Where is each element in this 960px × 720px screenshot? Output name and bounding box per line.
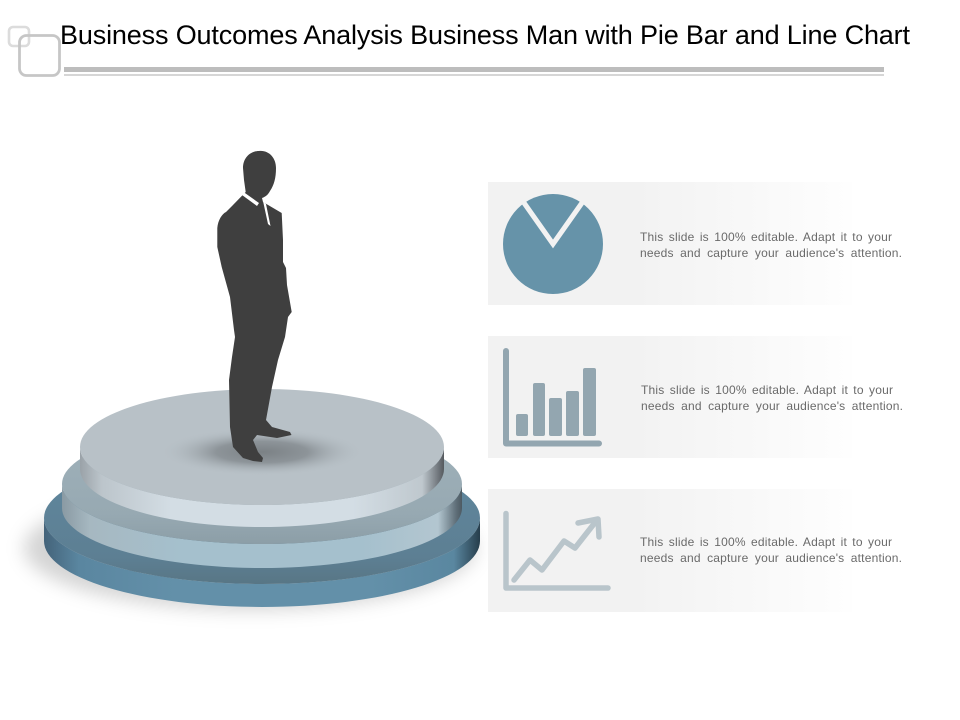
panel: pie chart — [488, 182, 902, 305]
title underline — [64, 67, 884, 76]
panel background — [488, 182, 852, 305]
collar and tie — [242, 192, 270, 226]
text block: This slide is 100% editable. Adapt it to your — [640, 535, 892, 549]
text block: needs and capture your audience's attention. — [640, 551, 902, 565]
businessman silhouette — [217, 151, 292, 462]
platform ground shadow — [24, 486, 476, 610]
icon: line chart with arrow — [506, 514, 608, 588]
text block: needs and capture your audience's attention. — [640, 246, 902, 260]
text block: This slide is 100% editable. Adapt it to your — [640, 230, 892, 244]
icon: bar chart — [506, 351, 599, 444]
panel: line chart — [488, 489, 902, 612]
platform middle tier — [62, 424, 462, 568]
panel: bar chart — [488, 336, 903, 458]
text block: This slide is 100% editable. Adapt it to your — [641, 383, 893, 397]
platform top tier — [80, 389, 444, 527]
stacked circular platform — [24, 389, 480, 610]
icon: pie chart — [503, 194, 603, 294]
panel background — [488, 336, 852, 458]
text block: needs and capture your audience's attention. — [641, 399, 903, 413]
panel background — [488, 489, 852, 612]
figure floor shadow — [160, 428, 364, 476]
platform bottom tier — [44, 452, 480, 607]
decorative icon: overlapping squares — [9, 27, 60, 76]
title: Business Outcomes Analysis Business Man with Pie Bar and Line Chart — [60, 20, 911, 50]
